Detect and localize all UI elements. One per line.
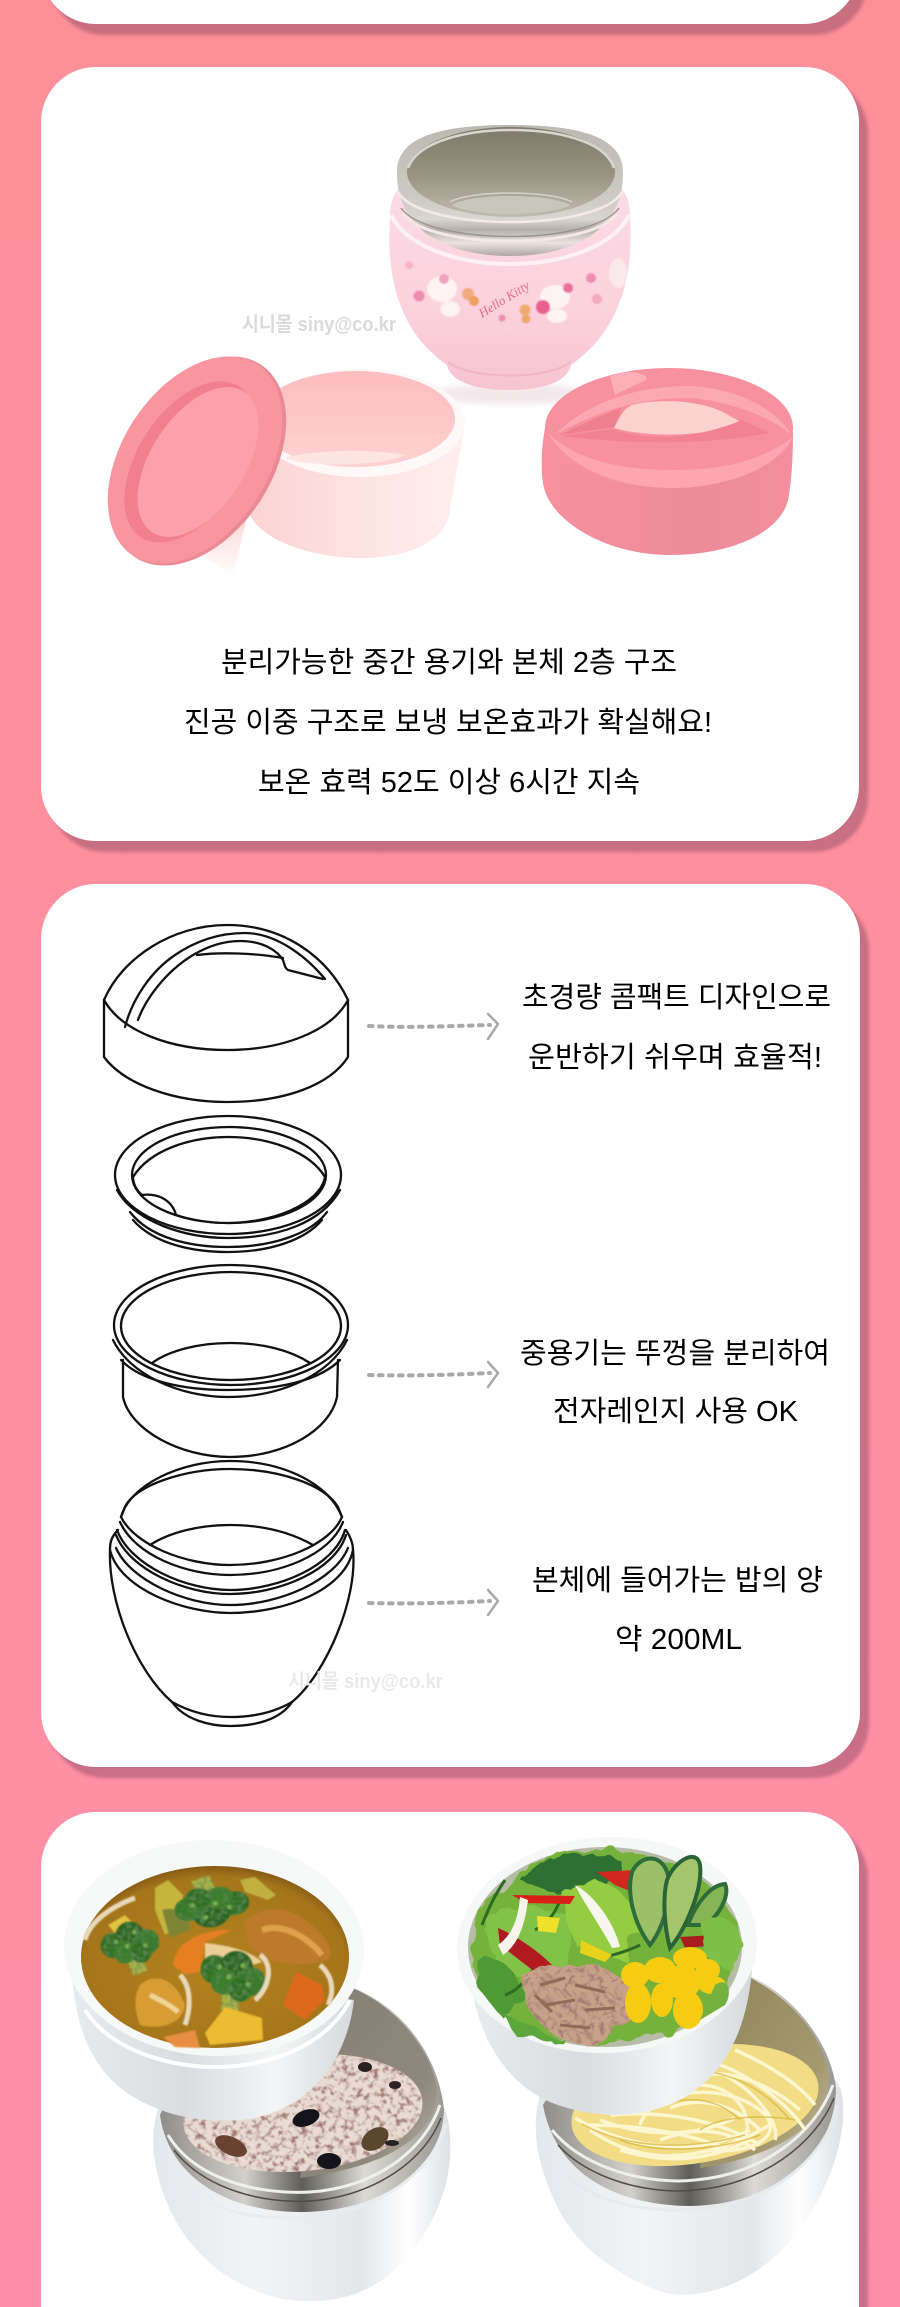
arrow: to middle container note [369,1362,498,1387]
photo: salad and noodle container [452,1829,843,2295]
icon: inner cup [200,369,465,577]
curry ingredients [85,1869,332,2048]
icon: white jar [536,1972,843,2295]
panel: food photos [41,1812,859,2307]
text block: rice capacity [532,1565,823,1656]
panel: exploded diagram [41,884,860,1767]
drawing: inner lid ring [115,1116,341,1252]
icon: character print [405,258,627,324]
print text: Hello Kitty [475,277,532,321]
noodles [562,2026,828,2184]
text block: microwave use: 전자레인지 사용 OK [553,1396,799,1428]
text block: rice capacity: 약 200ML [615,1623,742,1656]
icon: white bowl with curry [60,1835,368,2121]
caption: product parts: 분리가능한 중간 용기와 본체 2층 구조 [221,647,677,679]
drawing: middle container [113,1265,348,1457]
arrow: to lid note [369,1014,498,1039]
text block: compact design [522,981,831,1074]
text block: microwave use [520,1337,830,1428]
caption: product parts: 진공 이중 구조로 보냉 보온효과가 확실해요! [184,706,712,739]
product photo: parts of the pink container [72,125,793,598]
icon: white bowl with salad [452,1829,762,2115]
watermark: 시니몰 siny@co.kr [288,1670,443,1693]
arrow: to body note [369,1590,498,1615]
text block: compact design: 운반하기 쉬우며 효율적! [528,1041,822,1074]
icon: tilted lid [72,324,323,598]
text block: rice capacity: 본체에 들어가는 밥의 양 [532,1565,823,1597]
salad ingredients [471,1850,740,2044]
panel: previous card bottom edge [41,0,859,24]
caption: product parts: 보온 효력 52도 이상 6시간 지속 [258,767,640,799]
text block: microwave use: 중용기는 뚜껑을 분리하여 [520,1337,830,1370]
photo: curry and rice container [60,1835,450,2301]
icon: white jar [153,1985,450,2301]
drawing: handle cap [104,925,348,1102]
drawing: main body [110,1461,354,1726]
diagram: exploded line drawing [104,925,443,1726]
icon: pink outer cap [542,368,793,555]
text block: compact design: 초경량 콤팩트 디자인으로 [522,981,831,1014]
icon: pink vacuum jar [389,125,631,390]
panel: product parts [41,67,859,841]
caption: product parts [184,647,712,799]
rice with beans [178,2043,428,2183]
watermark: 시니몰 siny@co.kr [242,313,396,336]
